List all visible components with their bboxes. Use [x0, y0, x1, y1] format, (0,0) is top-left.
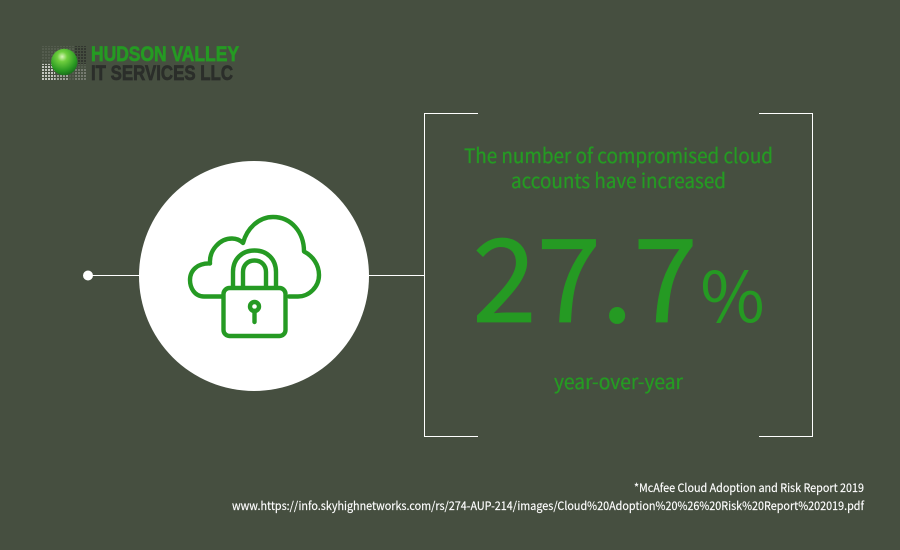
heading line 1: The number of compromised cloud — [464, 140, 773, 169]
logo text: Hudson Valley: HUDSON VALLEY — [91, 43, 239, 66]
padlock outer shackle — [233, 250, 276, 287]
white circle — [139, 161, 369, 391]
icon: logo pixel bars and sphere — [42, 46, 86, 80]
bracket frame — [424, 114, 812, 436]
logo text: IT Services LLC: IT SERVICES LLC — [91, 62, 233, 85]
logo — [42, 43, 239, 85]
stat text block — [464, 140, 773, 395]
big number: 27.7 — [472, 188, 698, 356]
padlock body — [224, 288, 286, 336]
source title: *McAfee Cloud Adoption and Risk Report 2019 — [634, 480, 864, 496]
source note — [232, 480, 865, 514]
icon: cloud with padlock — [190, 217, 319, 336]
percent sign: % — [700, 242, 765, 343]
source url: www.https://info.skyhighnetworks.com/rs/274-AUP-214/images/Cloud%20Adoption%20%26%20Risk%20Report%202019.pdf — [232, 498, 865, 514]
connector line with dot — [83, 270, 425, 280]
cloud outline — [190, 217, 319, 296]
heading line 2: accounts have increased — [511, 165, 726, 194]
year-over-year: year-over-year — [554, 366, 683, 395]
padlock inner shackle — [243, 260, 266, 287]
keyhole — [250, 302, 259, 311]
